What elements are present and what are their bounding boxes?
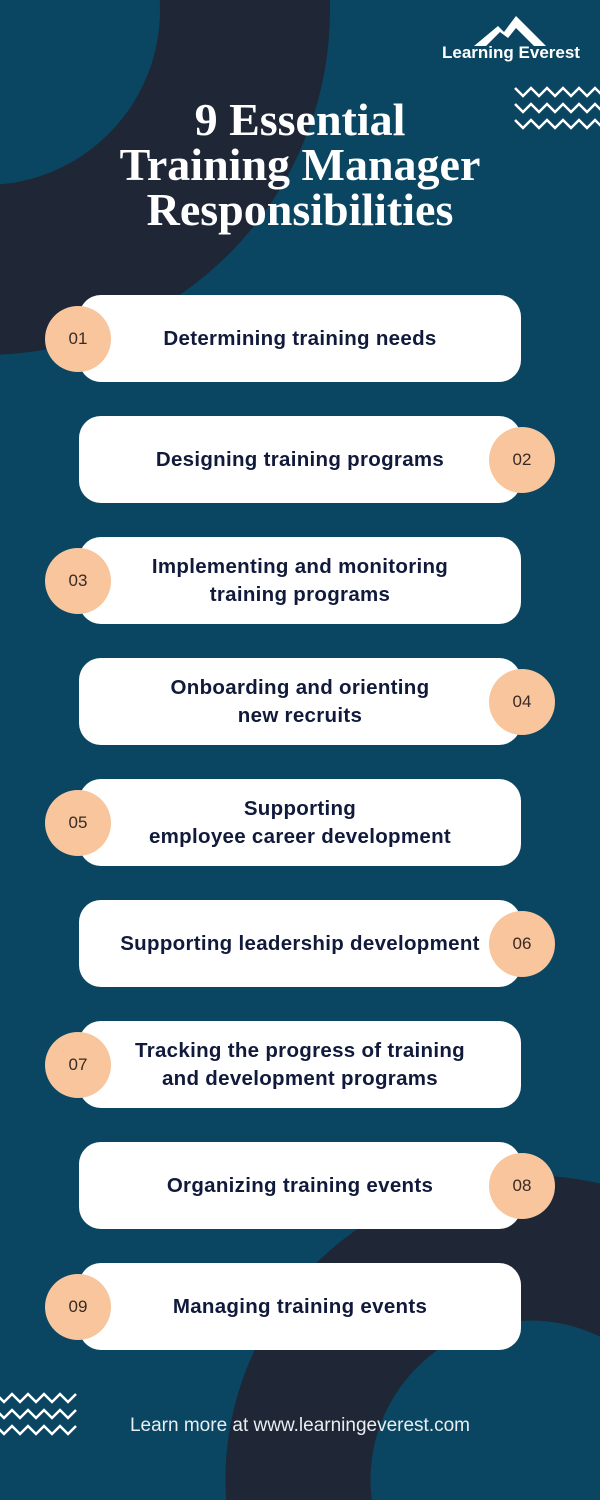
card 02: Designing training programs <box>156 448 444 470</box>
card 04: new recruits <box>238 704 362 726</box>
text: 04 <box>513 692 531 711</box>
card 04: Onboarding and orienting <box>171 676 429 698</box>
card 08: Organizing training events <box>167 1174 433 1196</box>
card 07: Tracking the progress of training <box>135 1038 465 1062</box>
text: 07 <box>69 1055 87 1074</box>
zigzag bottom left <box>0 1392 77 1436</box>
card 02 <box>79 416 521 503</box>
card 09: Managing training events <box>173 1294 427 1318</box>
card 03 <box>79 537 521 624</box>
card 03: training programs <box>210 582 390 606</box>
title: 9 Essential <box>195 94 405 145</box>
text: 03 <box>69 571 87 590</box>
text: 06 <box>513 934 531 953</box>
card 09 <box>79 1263 521 1350</box>
text: 02 <box>513 450 531 469</box>
card 08 <box>79 1142 521 1229</box>
title <box>120 94 480 235</box>
zigzag top right <box>514 86 600 130</box>
card 06 <box>79 900 521 987</box>
text: 01 <box>69 329 87 348</box>
text: 05 <box>69 813 87 832</box>
title: Training Manager <box>120 139 480 190</box>
logo: Learning Everest <box>442 43 580 62</box>
card 07 <box>79 1021 521 1108</box>
card 05: Supporting <box>244 796 356 820</box>
card 04 <box>79 658 521 745</box>
card 07: and development programs <box>162 1066 438 1090</box>
card 06: Supporting leadership development <box>120 932 480 954</box>
card 01 <box>79 295 521 382</box>
text: 09 <box>69 1297 87 1316</box>
title: Responsibilities <box>147 184 453 235</box>
card 03: Implementing and monitoring <box>152 554 448 578</box>
text: 08 <box>513 1176 531 1195</box>
logo <box>442 16 580 62</box>
footer: Learn more at www.learningeverest.com <box>130 1415 470 1436</box>
card 05: employee career development <box>149 824 451 848</box>
card 05 <box>79 779 521 866</box>
card 01: Determining training needs <box>163 326 437 350</box>
